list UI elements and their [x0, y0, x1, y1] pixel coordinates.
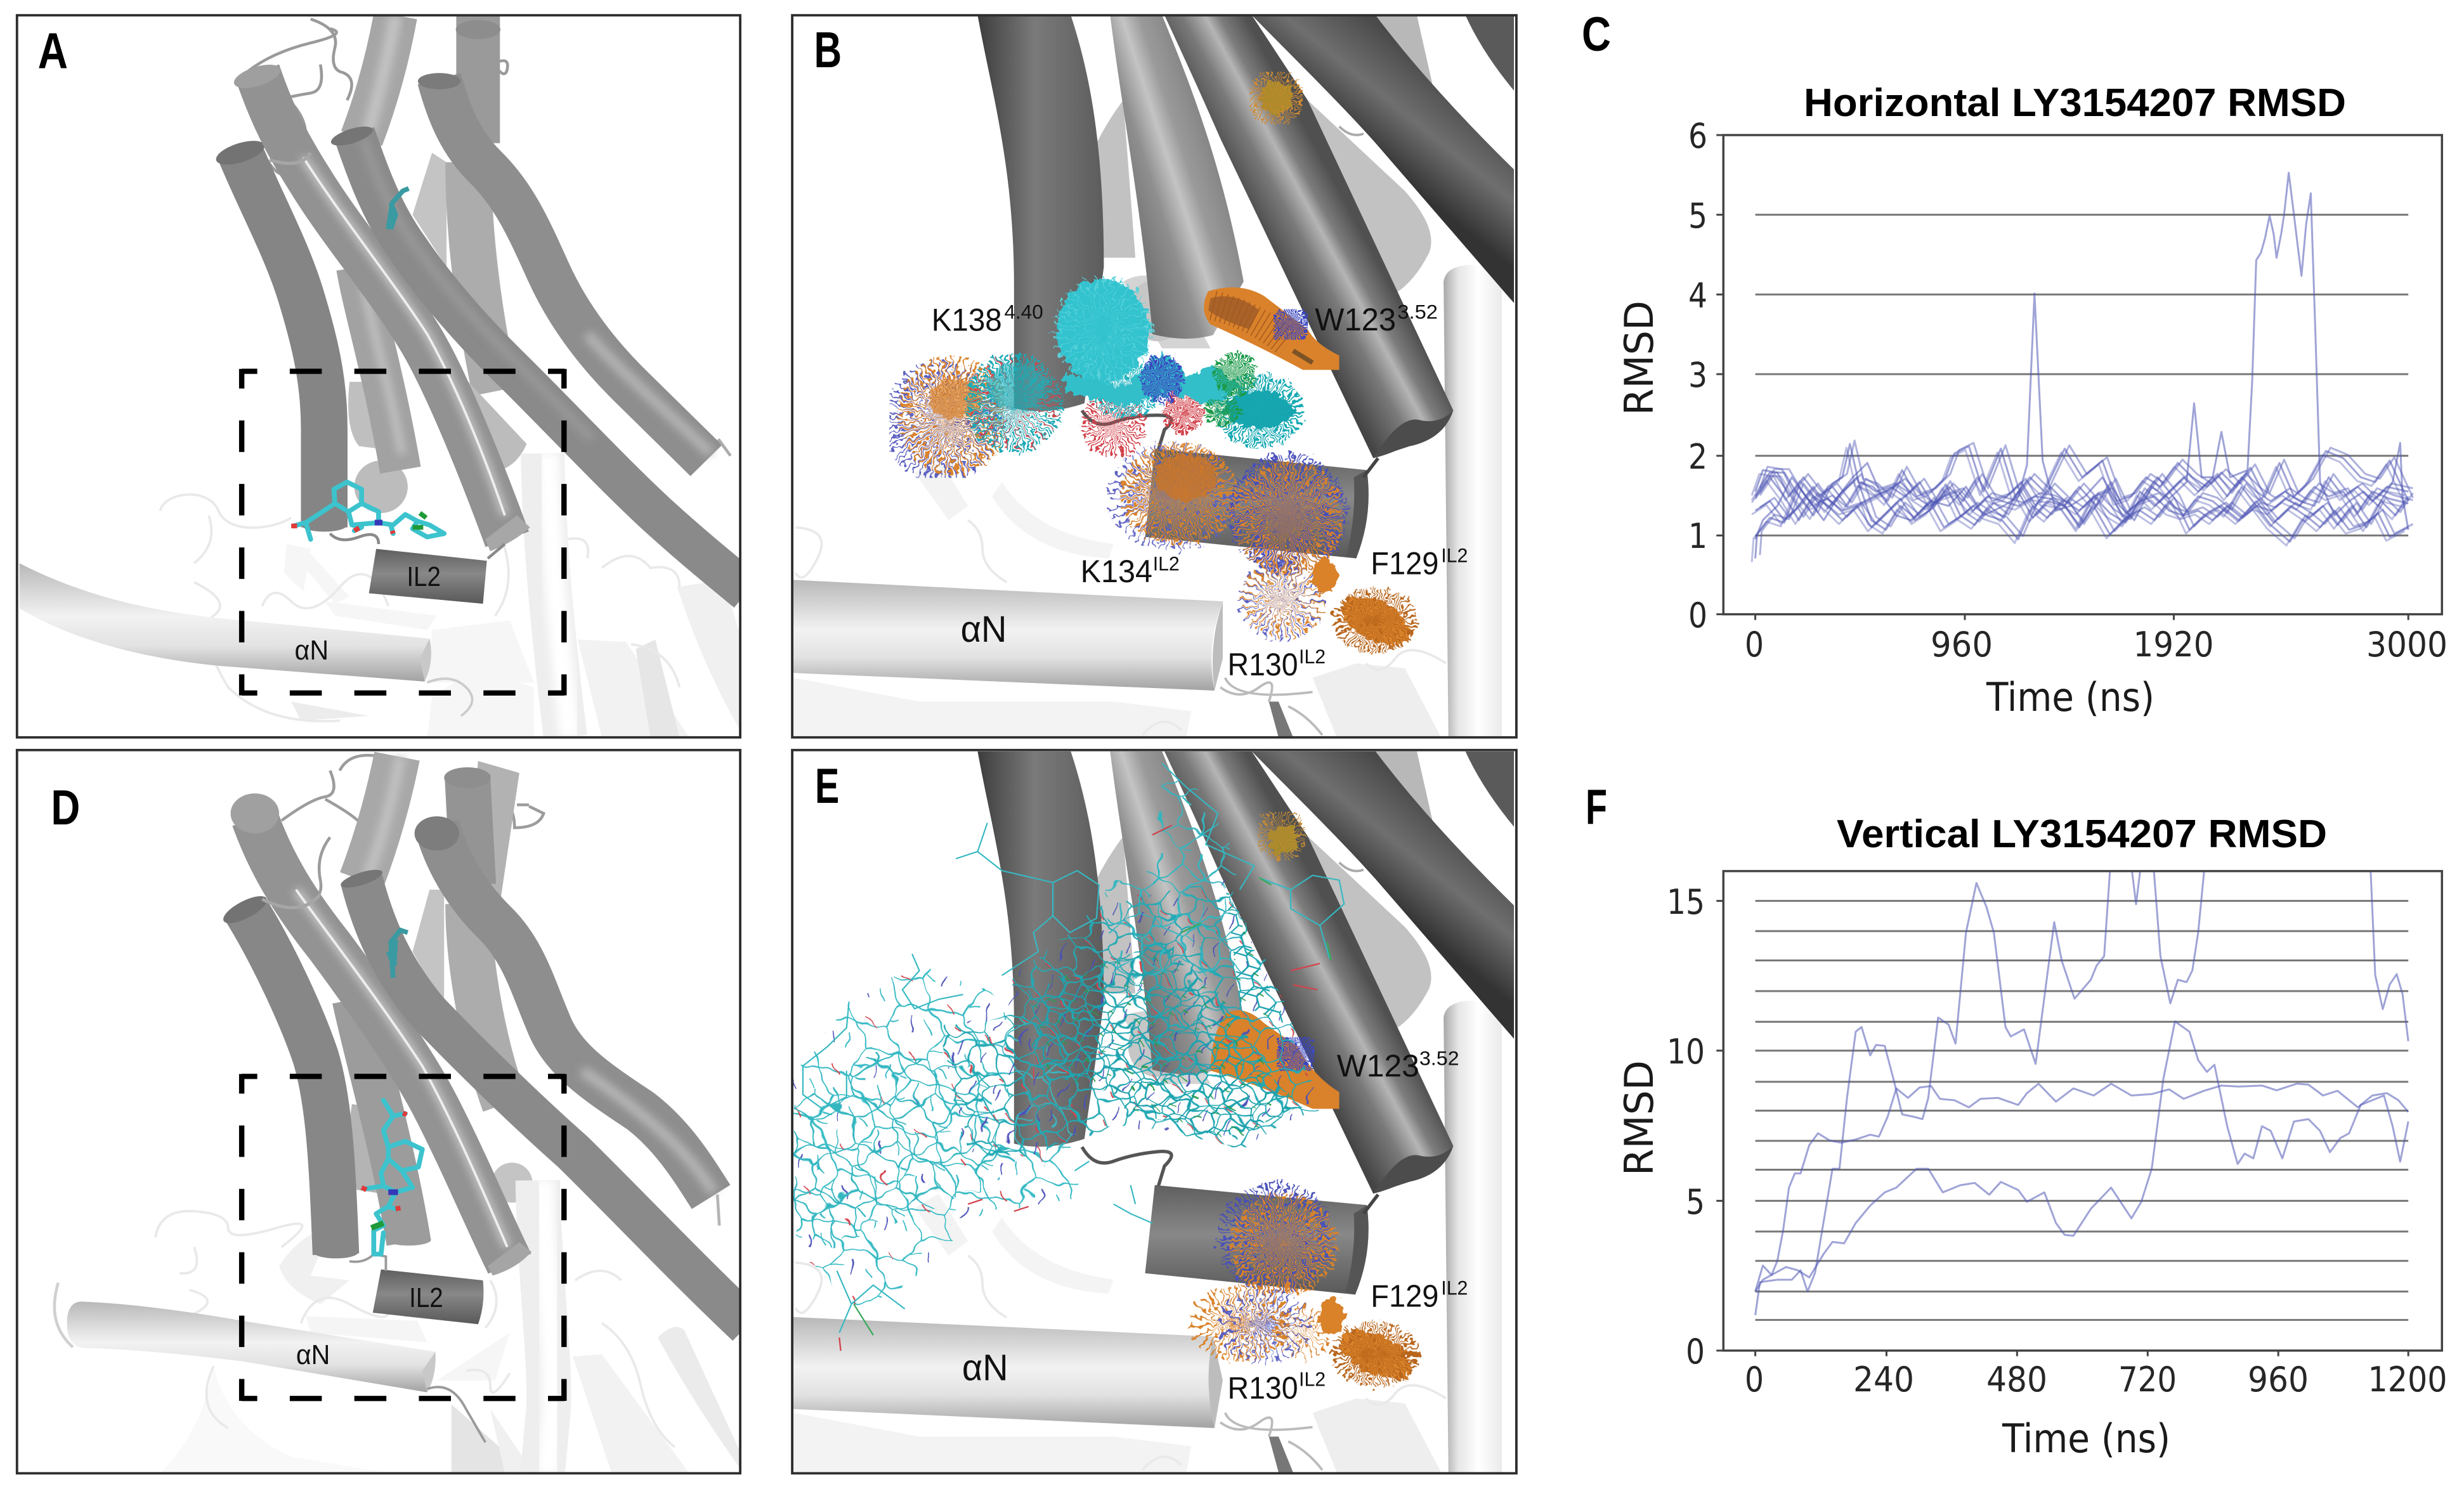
chart title F: Vertical LY3154207 RMSD	[1837, 812, 2327, 856]
y tick labels C: 2	[1688, 437, 1707, 477]
extra wire strands	[803, 764, 1344, 1351]
R130 label: R130	[1228, 1370, 1298, 1405]
frame A	[17, 15, 740, 738]
W123 label: W123	[1315, 302, 1396, 337]
R130 label: IL2	[1299, 645, 1326, 668]
dashed box D	[242, 1074, 564, 1401]
top loops	[247, 19, 507, 175]
top loops	[243, 755, 544, 918]
y tick labels C: 1	[1688, 516, 1707, 556]
helix b	[255, 818, 510, 1264]
y tick labels C: 6	[1688, 116, 1707, 156]
x tick labels C: 960	[1931, 625, 1993, 665]
letter A: A	[38, 23, 68, 79]
faint protein	[160, 1228, 740, 1473]
panel E structure and wire ligands	[793, 751, 1514, 1473]
connecting loop	[1082, 1147, 1171, 1190]
letter F: F	[1586, 779, 1607, 835]
W123 label: 3.52	[1419, 1047, 1459, 1069]
αN tube	[20, 563, 429, 682]
label IL2: IL2	[407, 562, 441, 592]
x tick labels F: 960	[2248, 1360, 2309, 1400]
helix a	[245, 909, 336, 1254]
y tick labels C: 0	[1688, 595, 1707, 635]
W123 cluster	[1204, 287, 1340, 370]
chart title C: Horizontal LY3154207 RMSD	[1804, 81, 2346, 125]
olive residue	[1260, 82, 1293, 114]
small upper ligand	[388, 930, 408, 978]
x tick labels F: 1200	[2368, 1360, 2447, 1400]
helix c	[355, 134, 748, 592]
helix d	[440, 79, 707, 460]
panel A structure	[20, 15, 748, 738]
x axis title C: Time (ns)	[1986, 674, 2154, 720]
IL2 residue clusters	[1139, 454, 1418, 655]
x tick labels C: 3000	[2366, 625, 2448, 665]
y tick labels F: 15	[1667, 882, 1705, 922]
panel A	[17, 15, 748, 738]
y tick labels C: 3	[1688, 355, 1707, 395]
panel E	[792, 750, 1516, 1473]
αN tube	[793, 1317, 1215, 1428]
RMSD traces F	[1756, 843, 2408, 1315]
label IL2: IL2	[409, 1282, 443, 1313]
W123 label	[1315, 301, 1438, 337]
plot F	[1716, 843, 2442, 1356]
panel F: vertical RMSD chart	[1586, 779, 2447, 1462]
frame D	[17, 750, 740, 1473]
letter B: B	[814, 22, 842, 79]
y tick labels C: 5	[1688, 196, 1707, 236]
panel C: horizontal RMSD chart	[1582, 8, 2448, 720]
panel D structure	[55, 755, 748, 1473]
αN label: αN	[962, 1346, 1008, 1389]
connecting loop	[1082, 410, 1171, 453]
axes frame C	[1716, 135, 2442, 620]
y tick labels F: 5	[1686, 1182, 1705, 1222]
x tick labels F: 240	[1853, 1360, 1914, 1400]
y tick labels C	[1688, 116, 1707, 635]
IL2 residue clusters	[1213, 1210, 1419, 1388]
RMSD traces C	[1752, 172, 2413, 562]
F129 label: F129	[1371, 1278, 1438, 1313]
small upper ligand	[388, 188, 408, 229]
label αN: αN	[295, 635, 329, 666]
y axis title C: RMSD	[1616, 301, 1662, 415]
y tick labels F	[1667, 882, 1705, 1372]
x tick labels F: 0	[1745, 1360, 1764, 1400]
K134 label: K134	[1081, 554, 1152, 589]
IL2 tube	[369, 549, 487, 604]
panel B	[792, 15, 1516, 738]
white helix	[538, 1180, 549, 1473]
axes frame F	[1716, 871, 2442, 1356]
y axis title F: RMSD	[1616, 1060, 1662, 1176]
F129 label: F129	[1371, 546, 1438, 581]
back helices	[362, 15, 396, 138]
helix a	[240, 153, 324, 528]
frame B	[792, 15, 1516, 738]
x tick labels F: 480	[1986, 1360, 2047, 1400]
IL2 tube	[1145, 448, 1368, 559]
IL2 tube	[373, 1270, 483, 1324]
x tick labels C: 0	[1745, 625, 1764, 665]
panel D	[17, 750, 748, 1473]
F129 label: IL2	[1441, 1277, 1468, 1299]
frame E	[792, 750, 1516, 1473]
y tick labels F: 0	[1686, 1332, 1705, 1372]
faint sheets	[284, 544, 689, 738]
W123 label: W123	[1337, 1048, 1419, 1083]
panel B structure and residues	[793, 15, 1514, 738]
W123 cluster	[1211, 1010, 1340, 1109]
x tick labels C	[1745, 625, 2448, 665]
αN label: αN	[961, 608, 1007, 650]
dashed box A	[242, 369, 564, 696]
back helices	[362, 757, 397, 880]
letter C: C	[1582, 8, 1611, 62]
x axis title F: Time (ns)	[2002, 1415, 2170, 1462]
αN tube	[67, 1301, 435, 1393]
white helix	[543, 453, 566, 738]
left wire cloud	[793, 966, 1074, 1309]
helix d	[437, 825, 711, 1197]
x tick labels F	[1745, 1360, 2447, 1400]
label αN: αN	[296, 1340, 330, 1370]
x tick labels C: 1920	[2134, 625, 2213, 665]
K138 residue cluster	[911, 379, 982, 455]
helix c	[362, 880, 748, 1325]
plot C	[1716, 135, 2442, 620]
olive residue	[1267, 821, 1298, 854]
y tick labels C: 4	[1688, 276, 1707, 316]
R130 label: IL2	[1299, 1368, 1326, 1391]
y tick labels F: 10	[1667, 1032, 1705, 1072]
ligand clusters	[988, 363, 1293, 442]
central wire cloud	[1007, 771, 1317, 1152]
K134 label: IL2	[1153, 552, 1180, 575]
letter D: D	[51, 780, 80, 835]
K138 label	[932, 301, 1043, 337]
K138 label: K138	[932, 302, 1002, 337]
letter E: E	[815, 758, 839, 814]
x tick labels F: 720	[2118, 1360, 2177, 1400]
ligand	[291, 482, 444, 539]
ligand	[362, 1100, 422, 1254]
W123 label	[1337, 1047, 1459, 1083]
W123 label: 3.52	[1397, 301, 1438, 323]
helix b	[257, 72, 507, 539]
αN tube	[793, 580, 1223, 691]
K138 label: 4.40	[1005, 301, 1043, 323]
R130 label: R130	[1228, 647, 1298, 682]
F129 label: IL2	[1441, 544, 1468, 567]
IL2 tube	[1145, 1185, 1368, 1295]
